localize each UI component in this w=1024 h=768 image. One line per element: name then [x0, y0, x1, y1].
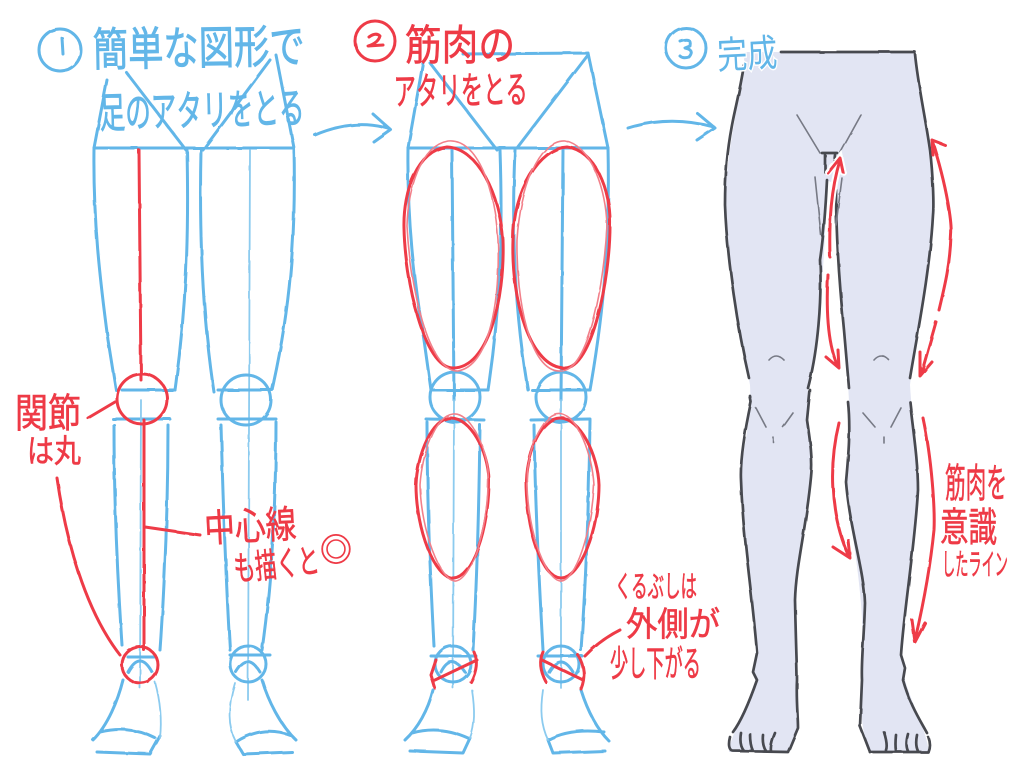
red arrows: muscle lines: [826, 140, 951, 642]
heading: step 1: [92, 20, 305, 137]
arrow: step 1 to step 2: [315, 114, 391, 142]
panel 3: finished legs: [666, 28, 1008, 752]
icon: step 2 number: [355, 21, 395, 61]
panel 2: muscle shapes: [355, 21, 720, 753]
icon: step 1 number: [39, 29, 81, 71]
callout: joints are round: は丸: [27, 433, 81, 469]
callout: outer ankle sits lower: [610, 571, 720, 684]
callout: draw center line: ◎: [320, 532, 352, 568]
callout: outer ankle sits lower: くるぶしは: [615, 571, 697, 604]
red ovals: thigh muscles: [404, 141, 610, 371]
heading: step 2: 筋肉の: [405, 22, 515, 69]
leg sketch: basic shapes: [93, 55, 296, 754]
icon: step 3 number: [666, 28, 706, 68]
callout: joints are round: 関節: [15, 392, 81, 436]
callout: outer ankle sits lower: 少し下がる: [610, 643, 701, 684]
callout: lines aware of muscle: 意識: [940, 506, 997, 550]
red marks: ankle slant: [431, 630, 620, 689]
outline: [725, 52, 933, 752]
callout: outer ankle sits lower: 外側が: [626, 606, 720, 644]
leg sketch: basic shapes: [405, 53, 609, 753]
leg fill: [725, 52, 933, 752]
heading: step 1: 足のアタリをとる: [99, 85, 305, 137]
red ovals: calf muscles: [416, 414, 599, 581]
heading: step 2: [393, 22, 528, 114]
panel 1: basic shapes: [15, 20, 352, 754]
heading: step 2: アタリをとる: [393, 70, 528, 114]
callout: lines aware of muscle: [940, 462, 1008, 582]
red center line and joints: [57, 150, 200, 683]
heading: step 3: 完成: [716, 33, 778, 78]
callout: joints are round: [15, 392, 81, 469]
callout: draw center line: [203, 504, 352, 589]
heading: step 1: 簡単な図形で: [92, 20, 305, 76]
callout: draw center line: 中心線: [203, 504, 297, 551]
arrow: step 2 to step 3: [628, 113, 715, 140]
callout: draw center line: も描くと: [232, 542, 321, 589]
finished figure: [725, 52, 933, 752]
